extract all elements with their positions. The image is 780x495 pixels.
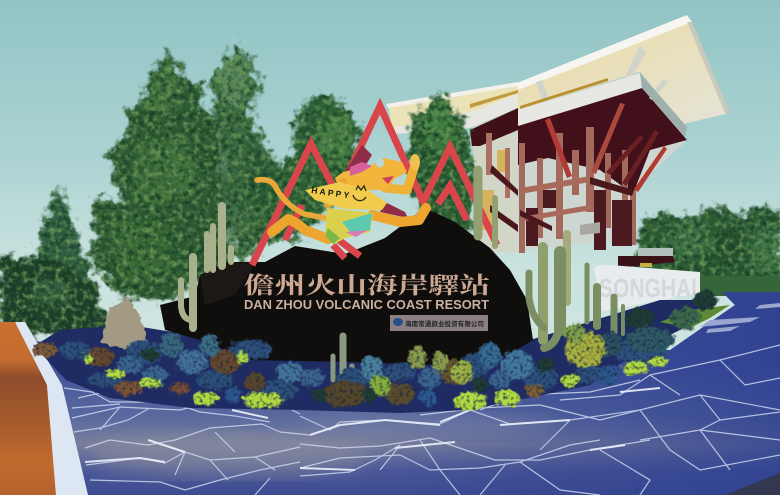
- company plate: [390, 315, 488, 331]
- rock: tan boulder: [100, 298, 148, 350]
- main roof: [517, 15, 730, 124]
- tree: far left conifer: [28, 190, 92, 300]
- brown succulents: [32, 343, 543, 407]
- cactus cluster left: [181, 206, 231, 328]
- rock: dark volcanic sign stone: [160, 208, 533, 365]
- mouth: [382, 176, 394, 184]
- red mountain frame: [252, 106, 497, 265]
- main structure columns: [518, 88, 687, 253]
- back leg: [272, 219, 328, 239]
- yellow-green shrubs: [369, 323, 605, 396]
- building: [386, 15, 730, 268]
- front leg: [372, 208, 426, 222]
- blue ground cover: [59, 336, 666, 400]
- surfboard: [305, 182, 387, 210]
- sign letters: [594, 265, 700, 311]
- orange running track: [0, 322, 56, 495]
- body and head: [335, 158, 407, 190]
- background trees right: [636, 205, 780, 290]
- sign title english: DAN ZHOU VOLCANIC COAST RESORT: [244, 297, 489, 312]
- eye: [376, 158, 384, 168]
- white kerb: [15, 322, 88, 495]
- cacti: [181, 170, 623, 382]
- mane: [350, 162, 372, 176]
- trees behind sign: [0, 44, 475, 335]
- main slab: [518, 73, 687, 137]
- raised hand: [410, 154, 420, 170]
- lower deck: [580, 222, 675, 268]
- small cacti: [333, 336, 352, 382]
- tree: large conifer: [92, 50, 230, 300]
- large cactus group: [529, 234, 623, 348]
- tail: [257, 180, 330, 219]
- sign title chinese: 儋州火山海岸驛站: [244, 273, 490, 298]
- left wing roof and slab: [386, 82, 518, 252]
- bright green succulents: [83, 352, 668, 410]
- tree: slim back tree: [212, 44, 283, 262]
- grass strip: [660, 305, 730, 328]
- succulents: [32, 290, 717, 410]
- smiley: [353, 186, 366, 201]
- dark foliage: [140, 290, 717, 403]
- left bushes: [0, 254, 108, 335]
- arm to board: [328, 182, 343, 204]
- company plate: 海南常通旅业投资有限公司: [405, 319, 484, 328]
- paving cracks: [64, 345, 780, 495]
- grass right: [700, 276, 780, 296]
- pavement: [32, 292, 780, 495]
- plant bed base: [34, 300, 715, 413]
- lizard mascot: [257, 145, 426, 244]
- shaded frame behind mascot: [345, 145, 408, 218]
- raised arm: [385, 165, 415, 190]
- tree: center trees behind frame: [258, 92, 475, 240]
- happy text: HAPPY: [311, 185, 352, 201]
- blue succulents: [117, 307, 700, 406]
- sign letters: SONGHAI: [599, 273, 697, 303]
- shorts: [325, 208, 373, 244]
- cacti by frame: [478, 170, 495, 246]
